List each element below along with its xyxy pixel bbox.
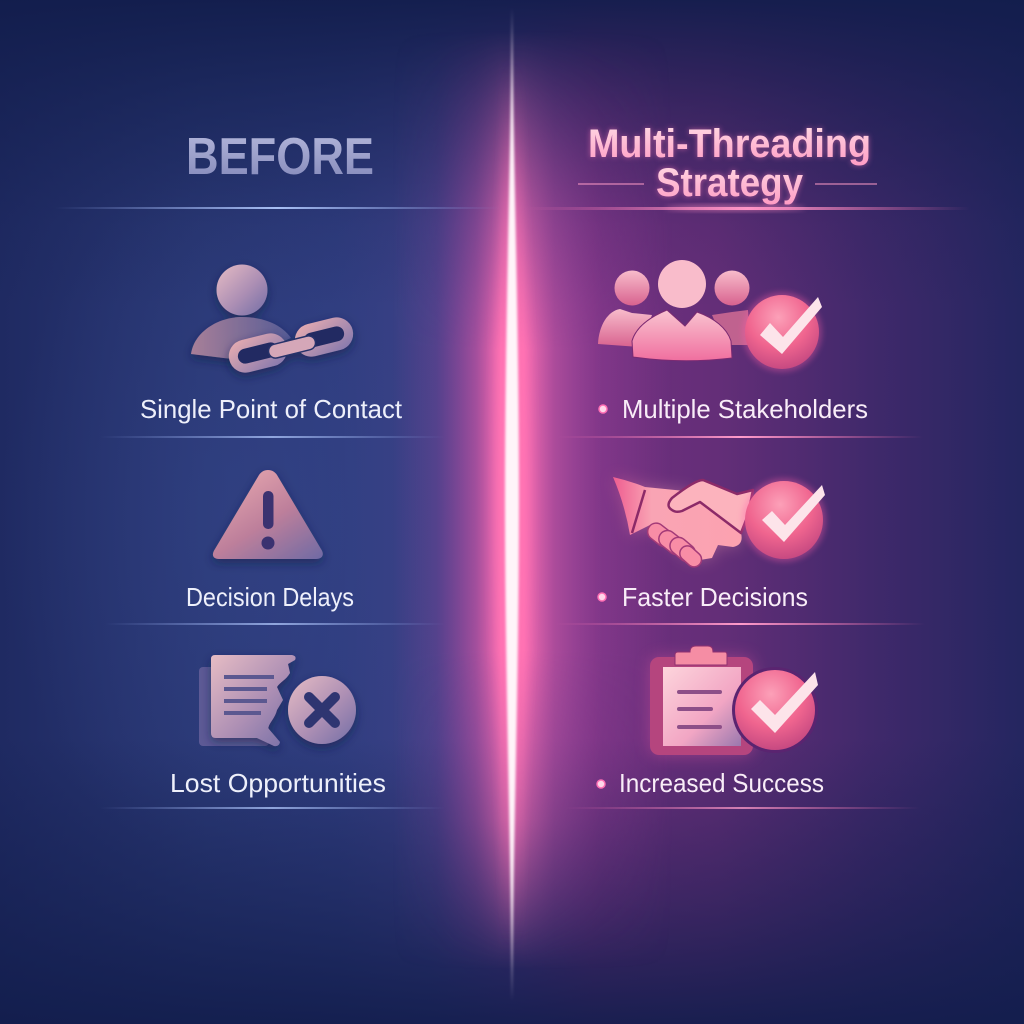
icon: stakeholders with check	[598, 260, 822, 372]
divider row 2	[105, 623, 445, 625]
right heading: Multi-Threading Strategy: Strategy	[656, 161, 804, 205]
panel: before	[100, 264, 445, 809]
label: Single Point of Contact: Single Point of Contact	[140, 394, 403, 424]
label: Increased Success: Increased Success	[619, 768, 824, 798]
header rules	[55, 205, 970, 211]
divider row 3 right	[565, 807, 920, 809]
label: Decision Delays: Decision Delays	[186, 582, 354, 612]
left heading: BEFORE: BEFORE	[186, 128, 374, 186]
label: Multiple Stakeholders: Multiple Stakeholders	[622, 394, 868, 424]
right heading: Multi-Threading Strategy: Multi-Threading	[588, 122, 871, 166]
icon: person with chain	[191, 264, 351, 371]
label: Lost Opportunities: Lost Opportunities	[170, 768, 386, 798]
panel: strategy	[555, 260, 925, 809]
icon: handshake with check	[613, 477, 826, 570]
icon: clipboard with check	[650, 646, 818, 755]
bullet 3	[597, 780, 605, 788]
label: Faster Decisions: Faster Decisions	[622, 582, 808, 612]
right heading: Multi-Threading Strategy: Multi-Threading	[588, 122, 871, 166]
icon: torn document with x	[199, 655, 356, 746]
divider row 1 right	[558, 436, 923, 438]
glowing center divider	[406, 16, 641, 992]
divider row 3	[100, 807, 445, 809]
divider row 1	[100, 436, 445, 438]
right heading: Multi-Threading Strategy: Strategy	[656, 161, 804, 205]
bullet 1	[599, 405, 607, 413]
right heading: Multi-Threading Strategy	[578, 122, 877, 205]
divider row 2 right	[555, 623, 925, 625]
bullet 2	[598, 593, 606, 601]
icon: warning triangle	[213, 470, 323, 559]
